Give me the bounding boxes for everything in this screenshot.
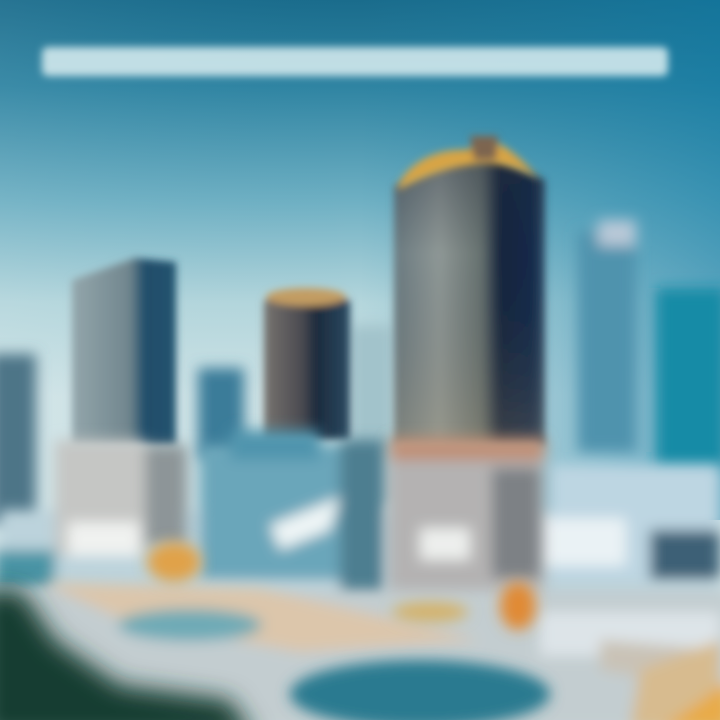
title band [42,47,668,76]
distant buildings [0,220,720,524]
tower: middle with golden top [264,288,350,440]
lower podium and city blocks [0,430,720,620]
orange accents [147,542,536,630]
waterfront plaza [0,582,720,720]
main tower [394,150,545,445]
water pool [290,660,550,720]
foreground trees [0,590,255,720]
main tower golden crown [398,136,540,190]
main tower base [388,438,545,608]
tower: left [72,258,176,445]
